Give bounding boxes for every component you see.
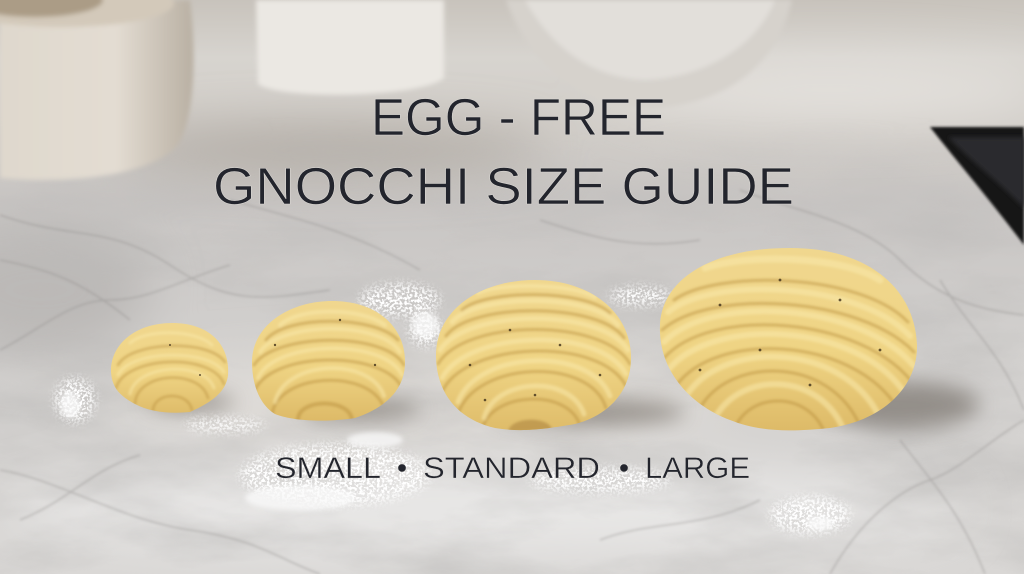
marble clouding <box>0 316 1024 574</box>
background flour bowl <box>506 0 792 108</box>
gnocchi: small <box>111 323 228 413</box>
pepper specks <box>169 279 881 401</box>
title: line two: GNOCCHI SIZE GUIDE <box>213 158 794 216</box>
gnocchi: large <box>436 280 631 430</box>
gnocchi: medium <box>252 301 405 421</box>
title: line one: EGG - FREE <box>371 89 666 147</box>
size labels: STANDARD <box>423 452 600 485</box>
gnocchi: extra large <box>660 248 917 430</box>
gnocchi shadows <box>145 381 980 429</box>
size labels: LARGE <box>645 452 750 485</box>
background cup <box>0 0 194 180</box>
marble veins <box>0 190 1024 574</box>
size labels: • <box>619 452 629 485</box>
size labels: SMALL <box>275 452 381 485</box>
size labels: • <box>397 452 407 485</box>
size labels <box>275 452 750 485</box>
background white jar <box>256 0 444 95</box>
background stove corner <box>930 127 1024 245</box>
flour dust <box>50 279 852 536</box>
